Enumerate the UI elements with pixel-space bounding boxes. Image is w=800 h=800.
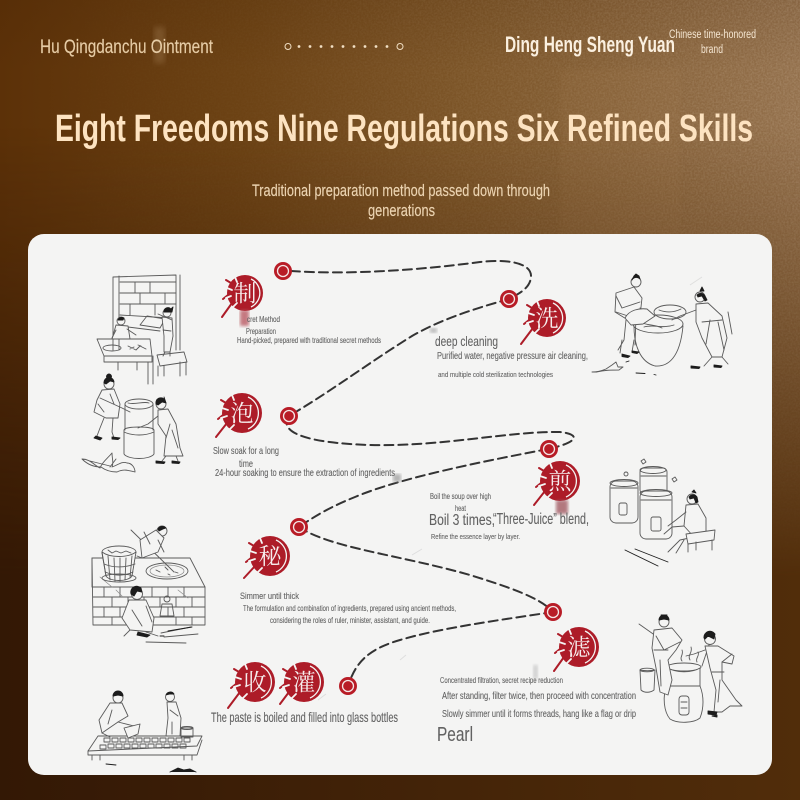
- step text: boil: “Three-Juice” blend,: [493, 511, 589, 528]
- seal: pao: 泡: [230, 395, 254, 428]
- seal: lv: [554, 627, 599, 671]
- illustration: boiling and storing in jars: [610, 459, 715, 566]
- step text: filtration: Concentrated filtration, secret recipe reduction: [440, 676, 563, 685]
- decorative dotted divider: [285, 44, 403, 50]
- step text: filling: The paste is boiled and filled into glass bottles: [211, 709, 398, 725]
- seal: jian: [534, 461, 580, 505]
- seal: zhi: [222, 275, 263, 317]
- step text: secret method: [237, 315, 381, 345]
- step text: filtration: After standing, filter twice, then proceed with concentration: [442, 691, 636, 702]
- step text: secret method: Hand-picked, prepared with traditional secret methods: [237, 336, 381, 345]
- subtitle: [252, 182, 550, 220]
- seal: mi: 秘: [258, 538, 282, 571]
- seal: jian: 煎: [548, 463, 572, 496]
- illustration: soaking in a barrel: [82, 374, 183, 472]
- step text: simmer: [240, 591, 456, 625]
- step text: slow soak: 24-hour soaking to ensure the extraction of ingredients: [215, 468, 395, 479]
- seal: guan: 灌: [292, 664, 316, 697]
- brand tagline: [669, 29, 756, 56]
- illustration: washing in a large vat: [592, 274, 732, 375]
- step text: deep cleaning: and multiple cold sterilization technologies: [438, 370, 553, 379]
- seal: guan: [280, 662, 324, 704]
- step text: secret method: Preparation: [246, 327, 276, 336]
- illustration: preparing herbs by the window: [97, 275, 187, 384]
- seal: xi: [521, 299, 566, 344]
- seal: mi: [244, 536, 290, 578]
- step text: simmer: The formulation and combination of ingredients, prepared using ancient methods,: [243, 604, 456, 613]
- subtitle: Traditional preparation method passed down through: [252, 182, 550, 200]
- step text: slow soak: time: [239, 459, 253, 470]
- step text: boil: [429, 492, 589, 541]
- illustration: concentrating over the stove: [639, 615, 742, 722]
- step text: filtration: [437, 676, 636, 746]
- seal: lv: 滤: [568, 629, 592, 662]
- seal: shou: [228, 662, 275, 708]
- step text: boil: Refine the essence layer by layer.: [431, 532, 520, 541]
- brand tagline: brand: [701, 44, 723, 56]
- smudges left by the source artwork: [240, 310, 568, 679]
- step text: secret method: cret Method: [247, 315, 280, 324]
- brand tagline: Chinese time-honored: [669, 29, 756, 41]
- brand name right: Ding Heng Sheng Yuan: [505, 32, 675, 57]
- panel: process sheet: [28, 234, 772, 775]
- dashed process path: [287, 261, 574, 686]
- step text: deep cleaning: [435, 333, 588, 379]
- step text: simmer: considering the roles of ruler, minister, assistant, and guide.: [270, 616, 430, 625]
- illustration: simmering on the brick stove: [92, 526, 205, 643]
- step text: filtration: Slowly simmer until it forms threads, hang like a flag or drip: [442, 709, 636, 720]
- brand name left: Hu Qingdanchu Ointment: [40, 37, 214, 58]
- step text: boil: Boil 3 times,: [429, 512, 495, 529]
- step text: simmer: Simmer until thick: [240, 591, 299, 602]
- seal: zhi: 制: [234, 275, 256, 308]
- step text: deep cleaning: Purified water, negative pressure air cleaning,: [437, 350, 588, 362]
- step text: filtration: Pearl: [437, 724, 473, 746]
- subtitle: generations: [368, 202, 435, 220]
- seal: shou: 收: [244, 664, 266, 697]
- step text: boil: Boil the soup over high: [430, 492, 491, 501]
- seal: xi: 洗: [536, 300, 558, 333]
- illustration: filling bottles on a long table: [88, 691, 202, 772]
- seal: pao: [216, 393, 262, 437]
- step text: slow soak: [213, 445, 395, 479]
- step text: boil: heat: [455, 504, 467, 513]
- step text: deep cleaning: deep cleaning: [435, 333, 498, 349]
- step text: slow soak: Slow soak for a long: [213, 445, 279, 457]
- node markers: [274, 262, 562, 695]
